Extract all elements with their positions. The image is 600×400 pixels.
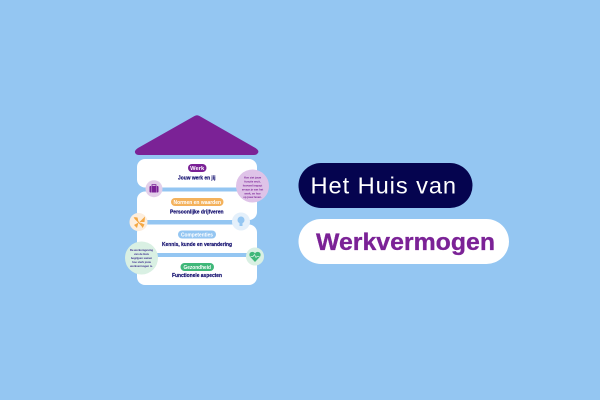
callout: green quote: van de Huis [134, 252, 150, 256]
title pill: Werkvermogen [298, 219, 509, 264]
heading: kennis, kunde en verandering: Kennis, kunde en verandering [162, 242, 232, 248]
callout: green quote [125, 242, 158, 274]
callout: purple quote: ervaar je van het [242, 188, 263, 192]
title pill: Werkvermogen: Werkvermogen [316, 229, 495, 256]
heading: jouw werk en jij: Jouw werk en jij [178, 175, 216, 181]
callout: purple quote: functie eruit, [244, 180, 261, 184]
title pill: Het Huis van [298, 163, 472, 208]
label pill: Normen en waarden: Normen en waarden [174, 200, 221, 206]
section: werk [178, 164, 216, 181]
heading: persoonlijke drijfveren: Persoonlijke drijfveren [170, 210, 224, 216]
callout: green quote: begrijpen samen [131, 256, 153, 260]
callout: purple quote: Hoe ziet jouw [244, 176, 262, 180]
section: gezondheid [172, 263, 222, 279]
heading: functionele aspecten: Functionele aspecten [172, 273, 222, 279]
icon: heart [246, 248, 264, 266]
callout: green quote: De werkomgeving [130, 248, 153, 252]
callout: purple quote: werk, en hoe [243, 192, 261, 196]
callout: purple quote: hoeveel impact [243, 184, 262, 188]
section: competenties [162, 230, 232, 248]
icon: light bulb [232, 212, 250, 230]
icon: butterfly [130, 213, 148, 231]
label pill: Werk: Werk [190, 166, 204, 172]
title pill: Het Huis van: Het Huis van [310, 172, 457, 198]
callout: green quote: hoe sterk jouw [132, 260, 152, 264]
callout: purple quote: op jouw leven. [243, 195, 262, 199]
label pill: Competenties: Competenties [181, 232, 213, 238]
icon: house roof [135, 115, 258, 155]
label pill: Gezondheid: Gezondheid [184, 265, 211, 271]
callout: green quote: werkvermogen is. [129, 264, 153, 268]
section: normen en waarden [170, 198, 224, 216]
connector bar: competenties [150, 253, 248, 257]
panel: house body [137, 159, 257, 285]
icon: suitcase [146, 180, 162, 197]
callout: purple quote [236, 170, 269, 202]
